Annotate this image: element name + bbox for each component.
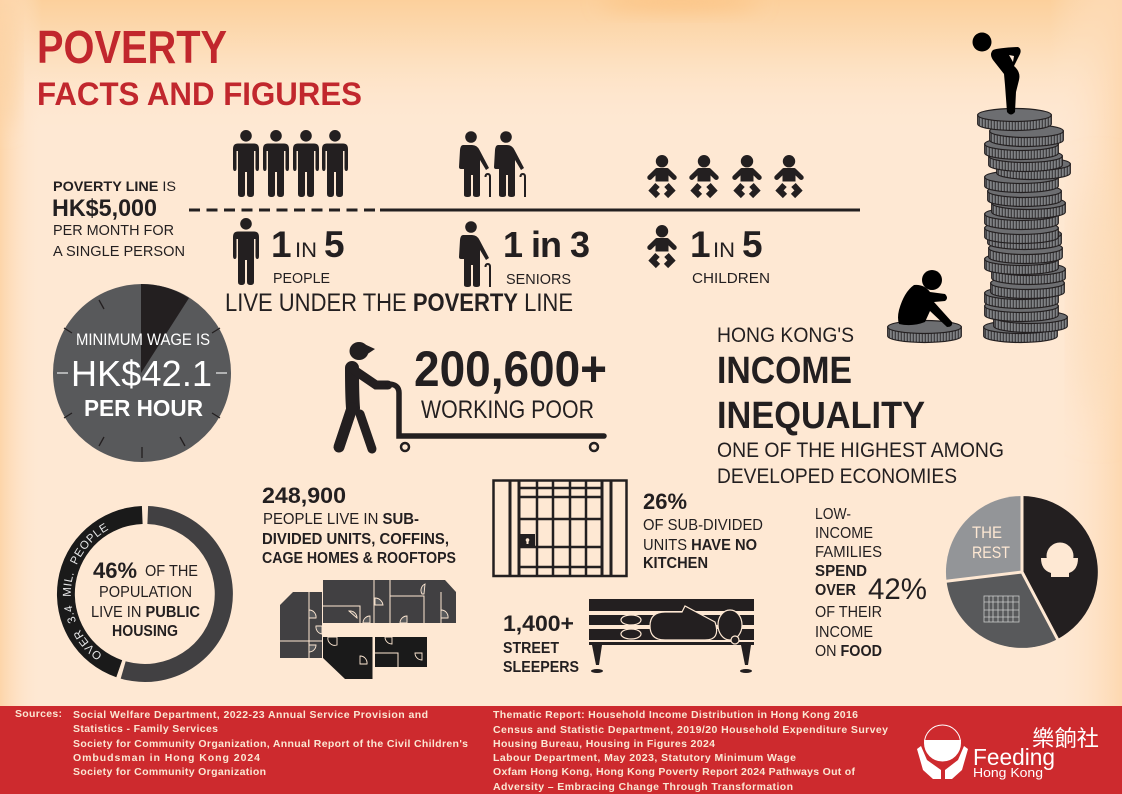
icon: rice bowl <box>1041 542 1078 577</box>
stat: sub-divided units <box>262 483 456 567</box>
icon: cage cell <box>494 480 626 576</box>
sources: right column: Housing Bureau, Housing in Figures 2024 <box>493 738 715 750</box>
stat: sub-divided units: 248,900 <box>262 483 346 508</box>
sources: right column: Adversity – Embracing Change Through Transformation <box>493 781 793 793</box>
stat: income spent on food: ON FOOD <box>815 643 882 660</box>
icon: street sleeper on bench <box>589 599 754 673</box>
stat: 1 in 3 seniors: 1 in 3 <box>503 224 590 265</box>
icons: babies above line <box>650 155 801 196</box>
poverty line <box>189 208 860 212</box>
stat: income spent on food <box>815 506 927 660</box>
sources: left column: Statistics - Family Services <box>73 723 218 735</box>
logo: Feeding Hong Kong: Feeding <box>973 744 1055 770</box>
stat: income spent on food: INCOME <box>815 624 873 641</box>
stat: working poor: 200,600+ <box>414 341 607 397</box>
icons: people above line <box>233 130 348 197</box>
sources: left column: Society for Community Organization, Annual Report of the Civil Children's <box>73 738 468 750</box>
figure standing bent over <box>972 32 1021 114</box>
sources: right column <box>493 709 888 793</box>
stat: working poor <box>414 341 607 424</box>
title <box>37 21 362 112</box>
stat: 1 in 5 children <box>650 224 770 287</box>
poverty line text: A SINGLE PERSON <box>53 243 185 260</box>
title: POVERTY <box>37 21 227 73</box>
title: FACTS AND FIGURES <box>37 76 362 112</box>
stat: sub-divided units: DIVIDED UNITS, COFFINS, <box>262 531 449 548</box>
pie chart: spending: REST <box>972 543 1010 562</box>
stat: 1 in 5 children: CHILDREN <box>692 270 770 287</box>
poverty line text: PER MONTH FOR <box>53 222 174 239</box>
clock: minimum wage: PER HOUR <box>84 395 203 421</box>
sources: left column <box>15 708 468 778</box>
sources: right column: Oxfam Hong Kong, Hong Kong Poverty Report 2024 Pathways Out of <box>493 766 856 778</box>
caption: live under the poverty line: LIVE UNDER THE POVERTY LINE <box>225 289 573 317</box>
clock: minimum wage <box>53 284 231 462</box>
donut: public housing: OVER 3.4 MIL. PEOPLE <box>62 523 108 660</box>
icon: small cage <box>984 596 1019 622</box>
stat: sub-divided units: PEOPLE LIVE IN SUB- <box>263 511 419 528</box>
donut: public housing: 46% <box>93 558 137 583</box>
stat: no kitchen: 26% <box>643 489 687 514</box>
stat: no kitchen: OF SUB-DIVIDED <box>643 517 763 534</box>
heading: income inequality: ONE OF THE HIGHEST AMONG <box>717 439 1004 462</box>
sources: left column: Sources: <box>15 708 62 720</box>
stat: 1 in 5 people: 5 <box>324 224 345 265</box>
stat: no kitchen: KITCHEN <box>643 555 708 572</box>
stat: income spent on food: SPEND <box>815 563 867 580</box>
footer band <box>0 706 1122 794</box>
heading: income inequality <box>717 324 1004 488</box>
pie chart: spending: THE <box>972 523 1002 542</box>
heading: income inequality: INEQUALITY <box>717 395 925 437</box>
heading: income inequality: HONG KONG'S <box>717 324 854 347</box>
heading: income inequality: DEVELOPED ECONOMIES <box>717 465 957 488</box>
stat: 1 in 3 seniors: SENIORS <box>506 271 571 288</box>
stat: no kitchen <box>643 489 763 572</box>
stat: 1 in 3 seniors <box>459 221 590 288</box>
stat: working poor: WORKING POOR <box>421 396 594 424</box>
clock: minimum wage: HK$42.1 <box>71 353 212 394</box>
poverty line text: HK$5,000 <box>52 195 157 222</box>
icon: worker pushing cart <box>339 342 604 451</box>
stat: 1 in 5 children: 5 <box>742 224 763 265</box>
stat: 1 in 5 people: IN <box>295 239 317 262</box>
stat: 1 in 5 children: 1 <box>690 224 711 265</box>
sources: right column: Census and Statistic Department, 2019/20 Household Expenditure Survey <box>493 724 888 736</box>
illustration: coin stack with figures <box>888 32 1070 342</box>
stat: sub-divided units: CAGE HOMES & ROOFTOPS <box>262 550 456 567</box>
stat: 1 in 5 people: PEOPLE <box>273 270 330 287</box>
sources: right column: Thematic Report: Household Income Distribution in Hong Kong 2016 <box>493 709 858 721</box>
sources: left column: Social Welfare Department, 2022-23 Annual Service Provision and <box>73 709 428 721</box>
donut: public housing: POPULATION <box>99 584 192 601</box>
stat: income spent on food: INCOME <box>815 525 873 542</box>
stat: street sleepers <box>503 611 579 676</box>
stat: income spent on food: OF THEIR <box>815 604 882 621</box>
logo: Feeding Hong Kong <box>917 721 1099 780</box>
heading: income inequality: INCOME <box>717 350 852 392</box>
stat: income spent on food: LOW- <box>815 506 851 523</box>
sources: right column: Labour Department, May 2023, Statutory Minimum Wage <box>493 752 796 764</box>
stat: no kitchen: UNITS HAVE NO <box>643 537 757 554</box>
stat: 1 in 5 people: 1 <box>271 224 292 265</box>
stat: income spent on food: FAMILIES <box>815 544 882 561</box>
stat: 1 in 5 children: IN <box>713 239 735 262</box>
stat: 1 in 5 people <box>233 218 345 287</box>
figure sitting on single coin <box>898 270 952 327</box>
donut: public housing: LIVE IN PUBLIC <box>91 604 200 621</box>
donut: public housing: HOUSING <box>112 623 178 640</box>
stat: street sleepers: SLEEPERS <box>503 659 579 676</box>
floor plan <box>280 580 456 679</box>
donut: public housing: OF THE <box>145 563 198 580</box>
logo: Feeding Hong Kong: Hong Kong <box>973 765 1043 780</box>
stat: street sleepers: 1,400+ <box>503 611 574 636</box>
poverty line text <box>52 178 185 260</box>
clock: minimum wage: MINIMUM WAGE IS <box>76 330 210 349</box>
stat: street sleepers: STREET <box>503 640 559 657</box>
sources: left column: Society for Community Organization <box>73 766 266 778</box>
pie chart: spending <box>944 494 1098 648</box>
sources: left column: Ombudsman in Hong Kong 2024 <box>73 752 260 764</box>
stat: income spent on food: 42% <box>868 573 927 606</box>
stat: income spent on food: OVER <box>815 582 856 599</box>
donut: public housing <box>56 506 233 682</box>
poverty line text: POVERTY LINE IS <box>53 178 176 194</box>
logo: Feeding Hong Kong: 樂餉社 <box>1032 721 1099 753</box>
icons: seniors above line <box>459 131 525 197</box>
